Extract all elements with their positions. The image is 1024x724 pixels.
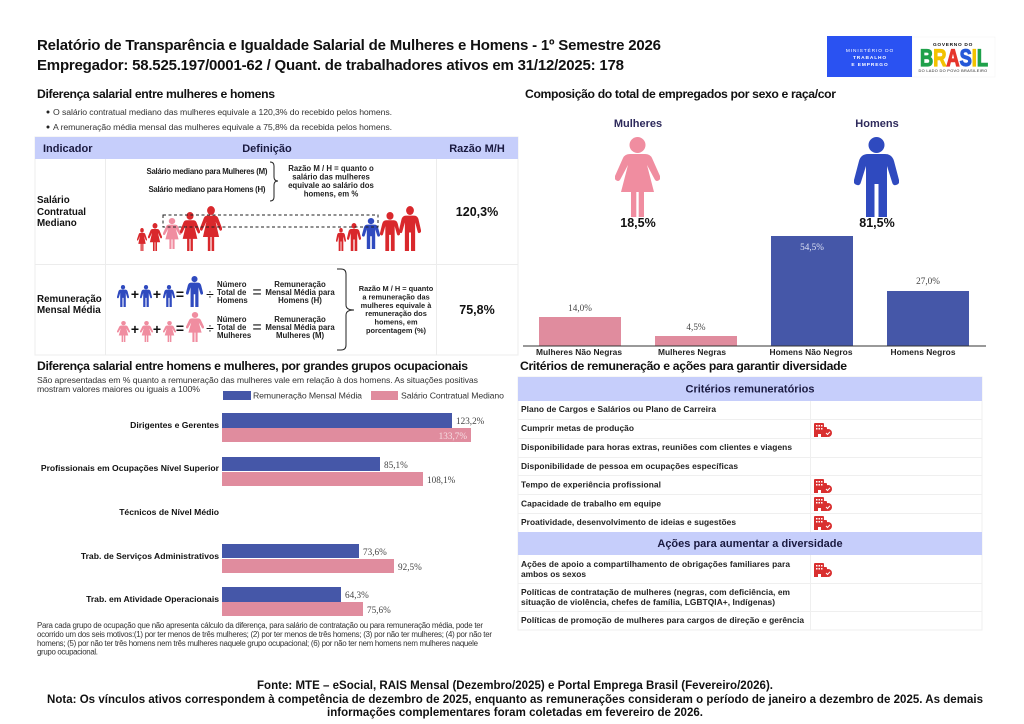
formula: men: Número (217, 280, 247, 289)
median definitions: Salário mediano para Mulheres (M) (146, 167, 268, 176)
row label: contractual salary: Contratual (37, 207, 86, 218)
mean definition with brace: mulheres equivale à (361, 301, 432, 310)
criteria rows: Tempo de experiência profissional (521, 480, 661, 490)
formula: men: Mensal Média para (265, 288, 335, 297)
median definitions: Salário mediano para Homens (H) (148, 185, 266, 194)
mean definition with brace: Razão M / H = quanto (359, 284, 434, 293)
formula: women: Mulheres (217, 331, 252, 340)
footnote: ocorrido um dos seis motivos:(1) por ter menos de três mulheres; (2) por ter menos de três homens; (3) por não ter mulheres; (4) por não ter (37, 630, 492, 639)
logo: ministry and government: E EMPREGO (851, 62, 889, 68)
description: São apresentadas em % quanto a remuneração das mulheres vale em relação à dos homens. As situações positivas (37, 375, 479, 385)
formula: men: = (252, 284, 262, 301)
row label: mean pay: Remuneração (37, 294, 102, 305)
mean definition with brace: a remuneração das (362, 292, 430, 302)
logo: ministry and government: MINISTÉRIO DO (846, 47, 894, 54)
formula: women: = (176, 320, 184, 336)
group: Serviços Administrativos (81, 544, 422, 573)
group: Profissionais: 108,1% (427, 475, 456, 485)
figure: men share: 81,5% (859, 216, 895, 230)
figure: men share: Homens (855, 118, 899, 130)
source and notes: Fonte: MTE – eSocial, RAIS Mensal (Dezembro/2025) e Portal Emprega Brasil (Fevereiro/2026). (257, 680, 773, 692)
table header: Indicador (43, 143, 93, 155)
value: contractual ratio: 120,3% (456, 205, 498, 219)
legend: Salário Contratual Mediano (401, 390, 504, 400)
criteria rows: Cumprir metas de produção (521, 423, 634, 433)
bullet list: A remuneração média mensal das mulheres equivale a 75,8% da recebida pelos homens. (53, 122, 392, 132)
row label: contractual salary: Salário (37, 195, 70, 206)
mean definition with brace: homens, em (374, 318, 418, 326)
header: remuneration criteria (518, 377, 982, 401)
logo: ministry and government: DO LADO DO POVO BRASILEIRO (919, 68, 987, 73)
formula: men: = (176, 286, 184, 302)
action rows: ambos os sexos (521, 569, 586, 579)
table header: Definição (242, 143, 292, 155)
heading: salary difference: Diferença salarial entre mulheres e homens (37, 87, 275, 101)
source and notes: Nota: Os vínculos ativos correspondem à competência de dezembro de 2025, enquanto as remunerações consideram o período de janeiro a dezembro de 2025. As demais (47, 694, 983, 706)
title: Relatório de Transparência e Igualdade Salarial de Mulheres e Homens - 1º Semestre 2026 (37, 37, 661, 54)
formula: women: Mensal Média para (265, 323, 335, 332)
figure: women share: 18,5% (620, 216, 656, 230)
median dashed connector (163, 215, 378, 227)
group: Profissionais (41, 457, 456, 486)
group: Serviços Administrativos: Trab. de Serviços Administrativos (81, 551, 219, 561)
median definitions: equivale ao salário dos (288, 181, 375, 190)
mean definition with brace: remuneração dos (365, 309, 427, 318)
formula: women: + (153, 321, 161, 337)
panel: indicator table (35, 137, 518, 355)
formula: men: Remuneração (274, 280, 326, 289)
formula: women: ÷ (206, 320, 214, 336)
header: diversity actions: Ações para aumentar a diversidade (657, 538, 843, 550)
header: remuneration criteria: Critérios remuneratórios (686, 384, 814, 396)
row label: mean pay (37, 294, 102, 316)
criteria rows: Capacidade de trabalho em equipe (521, 498, 661, 508)
formula: women: Total de (217, 323, 247, 332)
group: Dirigentes e Gerentes (130, 413, 485, 442)
formula: men: + (131, 286, 139, 302)
bar chart: composition by sex and race: Homens Negros (890, 347, 956, 357)
formula: women: = (252, 319, 262, 336)
heading: criteria: Critérios de remuneração e ações para garantir diversidade (520, 359, 847, 373)
group: Atividade Operacionais (86, 587, 391, 616)
footnote: grupo ocupacional. (37, 648, 98, 656)
figure: men share (854, 118, 899, 230)
panel: criteria table (518, 377, 982, 630)
group: Profissionais: 85,1% (384, 460, 408, 470)
value: mean ratio: 75,8% (459, 303, 495, 317)
legend (223, 390, 504, 400)
formula: women: Número (217, 315, 247, 324)
formula: men: + (153, 286, 161, 302)
footnote: Para cada grupo de ocupação que não apresenta cálculo da diferença, para salário de contratação ou para remuneração média, pode ter (37, 621, 483, 630)
formula: women: + (131, 321, 139, 337)
group: Serviços Administrativos: 92,5% (398, 562, 422, 572)
criteria rows: Disponibilidade de pessoa em ocupações específicas (521, 461, 738, 471)
bar chart: composition by sex and race (523, 236, 986, 357)
group: Profissionais: Profissionais em Ocupações Nível Superior (41, 463, 220, 473)
footnote: homens; (5) por não ter três homens nem três mulheres naquele grupo ocupacional; (6) por não ter nem homens nem mulheres naquele (37, 639, 479, 648)
criteria rows: Plano de Cargos e Salários ou Plano de Carreira (521, 404, 716, 414)
action rows (521, 559, 804, 625)
bar chart: composition by sex and race: 27,0% (916, 276, 940, 286)
criteria rows: Proatividade, desenvolvimento de ideias e sugestões (521, 517, 736, 527)
group: Dirigentes e Gerentes: 133,7% (439, 431, 467, 441)
bullet list (46, 107, 392, 132)
icons: women by salary (137, 206, 222, 251)
header: diversity actions (518, 532, 982, 555)
group: Dirigentes e Gerentes: Dirigentes e Gerentes (130, 420, 219, 430)
criteria rows (521, 404, 792, 527)
criteria rows: Disponibilidade para horas extras, reuniões com clientes e viagens (521, 442, 792, 452)
formula: men: Homens (H) (278, 296, 322, 305)
legend: Remuneração Mensal Média (253, 390, 362, 400)
bar chart: composition by sex and race: Mulheres Não Negras (536, 347, 622, 357)
group: Atividade Operacionais: 75,6% (367, 605, 391, 615)
action rows: Ações de apoio a compartilhamento de obrigações familiares para (521, 559, 790, 569)
median definitions (146, 162, 375, 201)
action rows: Políticas de promoção de mulheres para cargos de direção e gerência (521, 615, 804, 625)
bar chart: composition by sex and race: Homens Não Negros (770, 347, 853, 357)
icon: action check (814, 563, 832, 577)
group: Técnicos: Técnicos de Nível Médio (119, 507, 219, 517)
formula: men: Total de (217, 288, 247, 297)
formula: women: Mulheres (M) (276, 331, 324, 340)
heading: occupational groups: Diferença salarial entre homens e mulheres, por grandes grupos ocupacionais (37, 359, 468, 373)
table header: Razão M/H (449, 143, 505, 155)
bar chart: composition by sex and race: 4,5% (686, 322, 706, 332)
figure: women share (614, 118, 662, 230)
icons: criteria checks (814, 423, 832, 530)
group: Atividade Operacionais: Trab. em Atividade Operacionais (86, 594, 219, 604)
title (37, 37, 661, 74)
formula: women (117, 312, 335, 342)
action rows: situação de violência, chefes de família, LGBTQIA+, Indígenas) (521, 597, 775, 607)
title: Empregador: 58.525.197/0001-62 / Quant. de trabalhadores ativos em 31/12/2025: 178 (37, 57, 624, 74)
bar chart: composition by sex and race: 14,0% (568, 303, 592, 313)
median definitions: homens, em % (304, 190, 358, 198)
description: mostram valores maiores ou iguais a 100% (37, 384, 200, 394)
action rows: Políticas de contratação de mulheres (negras, com deficiência, em (521, 587, 790, 597)
group: Serviços Administrativos: 73,6% (363, 547, 387, 557)
table header (35, 137, 518, 159)
logo: ministry and government (827, 36, 995, 77)
median definitions: Razão M / H = quanto o (288, 164, 374, 173)
source and notes: informações complementares foram coletadas em fevereiro de 2026. (327, 707, 703, 719)
row label: mean pay: Mensal Média (37, 305, 101, 316)
formula: men (117, 276, 335, 307)
bullet list: O salário contratual mediano das mulheres equivale a 120,3% do recebido pelos homens. (53, 107, 392, 117)
bar chart: occupational groups (41, 413, 485, 616)
formula: men: Homens (217, 296, 248, 305)
mean definition with brace: porcentagem (%) (366, 326, 427, 335)
bar chart: composition by sex and race: 54,5% (800, 242, 824, 252)
group: Dirigentes e Gerentes: 123,2% (456, 416, 485, 426)
median definitions: salário das mulheres (292, 172, 370, 182)
formula: women: Remuneração (274, 315, 326, 324)
description (37, 375, 479, 394)
source and notes (47, 680, 983, 719)
logo: ministry and government: BRASIL (920, 45, 988, 72)
group: Atividade Operacionais: 64,3% (345, 590, 369, 600)
logo: ministry and government: TRABALHO (853, 55, 887, 61)
figure: women share: Mulheres (614, 118, 662, 130)
footnote (37, 621, 492, 656)
row label: contractual salary: Mediano (37, 218, 77, 229)
bar chart: composition by sex and race: Mulheres Negras (658, 347, 726, 357)
logo: ministry and government: GOVERNO DO (933, 42, 973, 48)
icons: men by salary (336, 206, 421, 251)
row label: contractual salary (37, 195, 86, 229)
mean definition with brace (337, 269, 434, 350)
heading: composition: Composição do total de empregados por sexo e raça/cor (525, 87, 836, 101)
formula: men: ÷ (206, 286, 214, 302)
